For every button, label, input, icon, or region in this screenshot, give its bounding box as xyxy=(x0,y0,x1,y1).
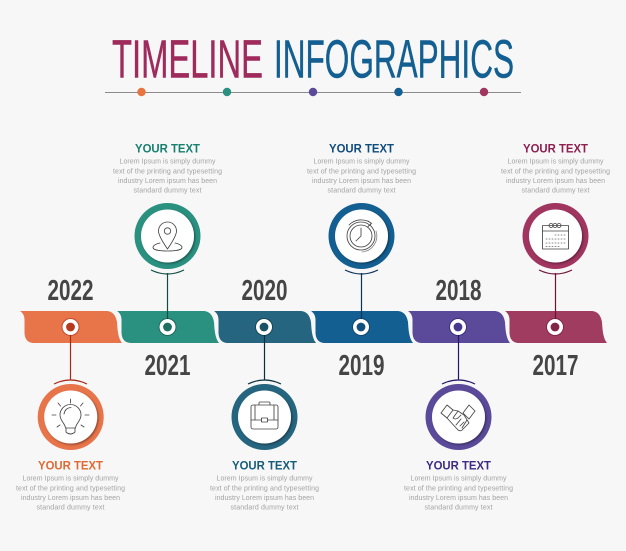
icon: clock with arrow xyxy=(347,220,377,252)
heading: YOUR TEXT xyxy=(523,144,588,156)
body text: text of the printing and typesetting xyxy=(16,486,125,492)
body text: Lorem Ipsum is simply dummy xyxy=(314,158,410,166)
body text: industry Lorem ipsum has been xyxy=(21,495,120,502)
connector xyxy=(248,335,281,384)
body text: standard dummy text xyxy=(424,504,493,512)
body text: industry Lorem ipsum has been xyxy=(215,495,314,502)
heading: YOUR TEXT xyxy=(232,460,297,472)
title xyxy=(112,30,514,90)
connector xyxy=(151,270,184,319)
body text xyxy=(404,476,513,512)
band node xyxy=(255,318,273,336)
connector xyxy=(539,270,572,319)
band node xyxy=(546,318,564,336)
body text: Lorem Ipsum is simply dummy xyxy=(22,476,119,482)
body text xyxy=(210,476,319,512)
body text: Lorem Ipsum is simply dummy xyxy=(120,158,216,166)
band node xyxy=(158,318,176,336)
medallion xyxy=(38,384,104,450)
step 2017: crimson, above band xyxy=(501,144,610,336)
step 2018: purple, below band xyxy=(404,318,513,512)
icon: briefcase xyxy=(251,402,278,429)
body text: industry Lorem ipsum has been xyxy=(312,178,411,185)
icon: handshake xyxy=(441,405,475,431)
year 2020: 2020 xyxy=(242,275,288,307)
step 2019: blue, above band xyxy=(307,144,416,336)
body text xyxy=(501,158,610,194)
body text: text of the printing and typesetting xyxy=(404,486,513,492)
heading: YOUR TEXT xyxy=(135,144,200,156)
year 2017: 2017 xyxy=(532,350,578,382)
medallion xyxy=(328,203,394,269)
band node xyxy=(352,318,370,336)
connector xyxy=(442,335,475,384)
body text xyxy=(307,158,416,194)
connector xyxy=(54,335,87,384)
icon: map pin xyxy=(153,222,182,251)
body text: industry Lorem ipsum has been xyxy=(506,178,605,185)
icon: light bulb xyxy=(52,399,89,434)
medallion xyxy=(232,384,298,450)
body text: text of the printing and typesetting xyxy=(210,486,319,492)
title: TIMELINE xyxy=(112,30,263,90)
year 2022: 2022 xyxy=(48,275,94,307)
body text: Lorem Ipsum is simply dummy xyxy=(508,158,604,166)
connector xyxy=(345,270,378,319)
body text: text of the printing and typesetting xyxy=(113,168,222,176)
body text: industry Lorem ipsum has been xyxy=(409,495,508,502)
year 2021: 2021 xyxy=(144,350,190,382)
year 2018: 2018 xyxy=(436,275,482,307)
medallion xyxy=(134,203,200,269)
step 2022: orange, below band xyxy=(16,318,125,512)
title divider with dots xyxy=(105,88,521,96)
body text: standard dummy text xyxy=(328,188,396,194)
body text: standard dummy text xyxy=(134,188,202,194)
heading: YOUR TEXT xyxy=(38,460,103,472)
band node xyxy=(449,318,467,336)
body text xyxy=(113,158,222,194)
body text: text of the printing and typesetting xyxy=(501,168,610,176)
body text: standard dummy text xyxy=(36,504,105,512)
body text: Lorem Ipsum is simply dummy xyxy=(410,476,507,482)
timeline band xyxy=(20,311,607,343)
body text xyxy=(16,476,125,512)
body text: standard dummy text xyxy=(230,504,299,512)
medallion xyxy=(522,203,588,269)
body text: text of the printing and typesetting xyxy=(307,168,416,176)
body text: standard dummy text xyxy=(522,188,590,194)
heading: YOUR TEXT xyxy=(426,460,491,472)
step 2021: teal, above band xyxy=(113,144,222,336)
icon: calendar xyxy=(542,224,568,249)
band node xyxy=(62,318,80,336)
medallion xyxy=(426,384,492,450)
body text: industry Lorem ipsum has been xyxy=(118,178,217,185)
year 2019: 2019 xyxy=(338,350,384,382)
heading: YOUR TEXT xyxy=(329,144,394,156)
body text: Lorem Ipsum is simply dummy xyxy=(216,476,313,482)
step 2020: slate blue, below band xyxy=(210,318,319,512)
